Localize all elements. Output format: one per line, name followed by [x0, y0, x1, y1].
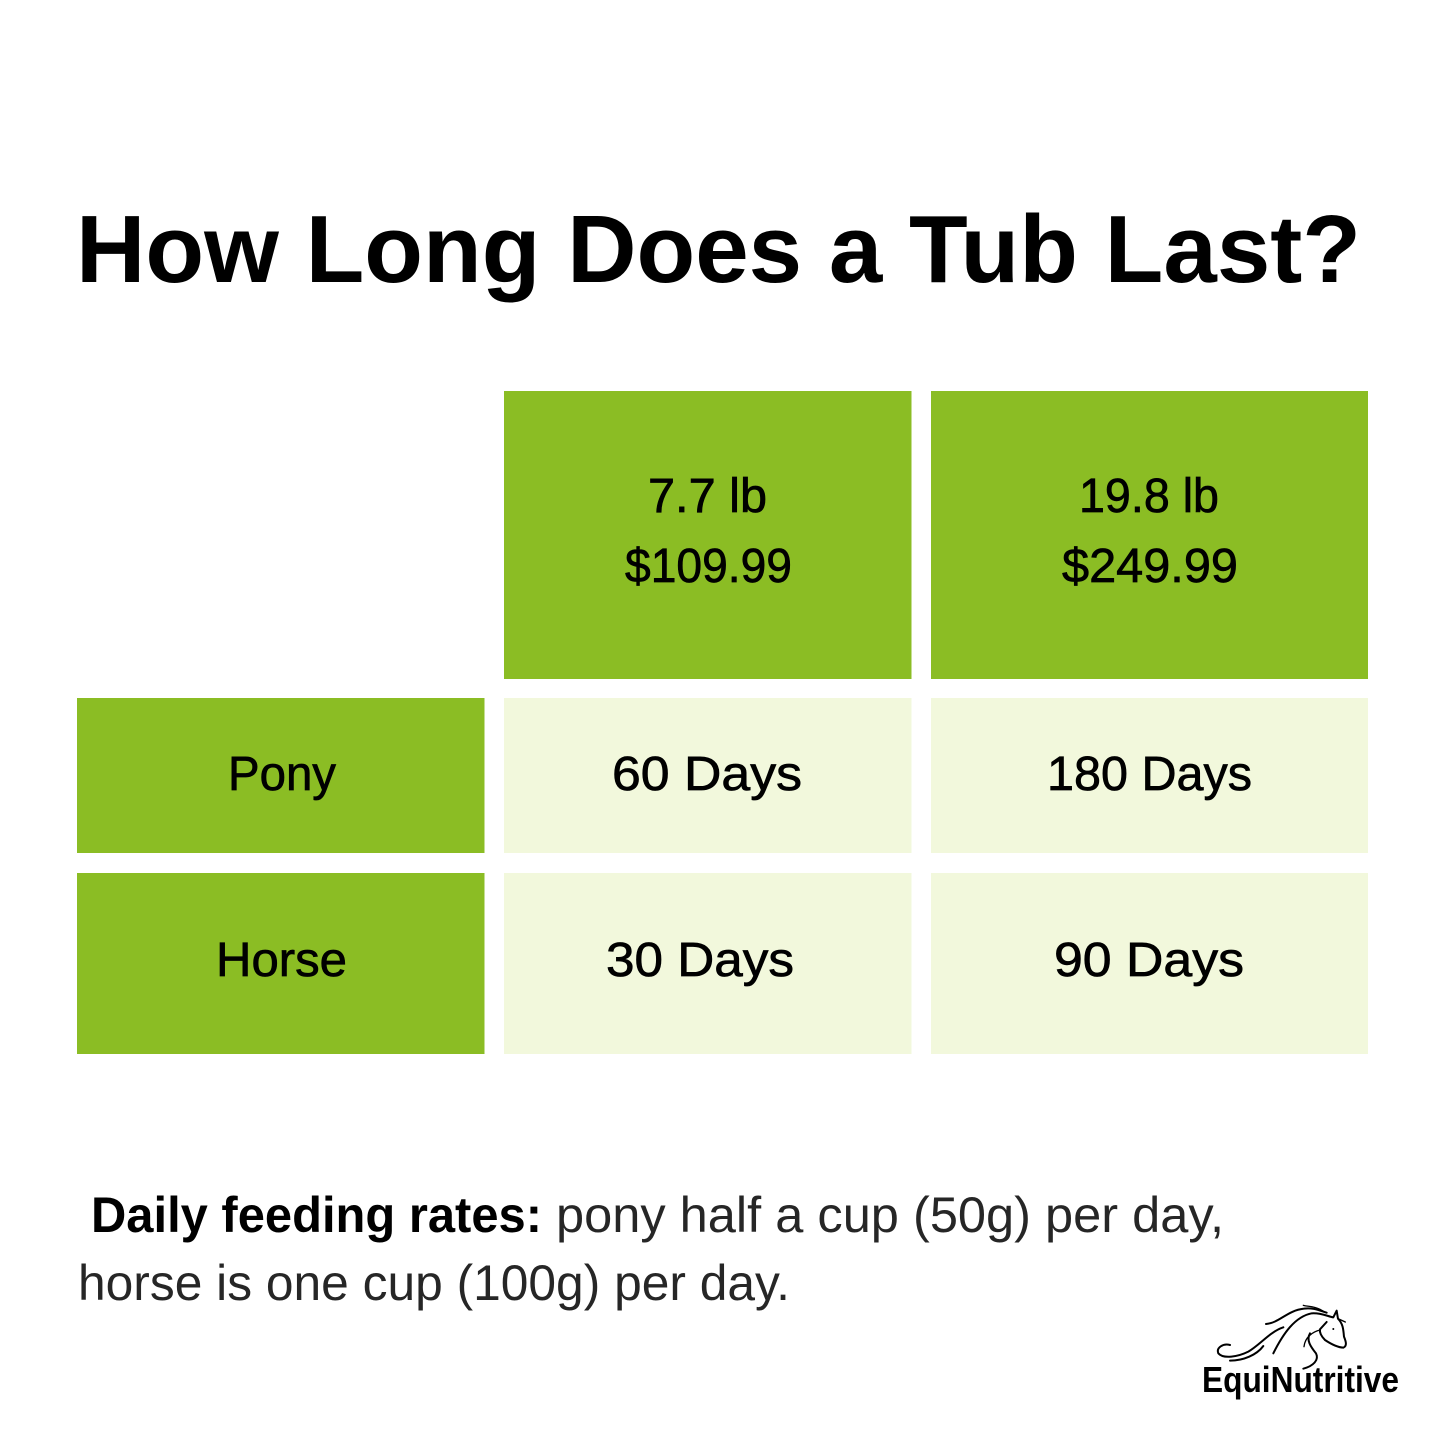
header cell: 7.7 lb tub: $109.99	[625, 540, 792, 593]
row label: Pony	[77, 698, 484, 853]
header cell: 19.8 lb tub: 19.8 lb	[1079, 470, 1219, 523]
cell: Pony 7.7 lb: 60 Days	[612, 748, 802, 801]
cell: Horse 7.7 lb	[504, 873, 912, 1054]
logo: EquiNutritive	[1202, 1305, 1399, 1400]
icon: horse	[1218, 1305, 1346, 1369]
feeding rates note: pony half a cup (50g) per day,	[556, 1187, 1224, 1243]
row label: Pony: Pony	[228, 748, 336, 801]
header cell: 7.7 lb tub	[504, 391, 912, 679]
row label: Horse: Horse	[216, 934, 347, 987]
feeding rates note: horse is one cup (100g) per day.	[78, 1255, 790, 1311]
table	[77, 391, 1368, 1054]
row label: Horse	[77, 873, 484, 1054]
logo wordmark: EquiNutritive	[1202, 1359, 1399, 1400]
cell: Pony 19.8 lb	[931, 698, 1368, 853]
feeding rates note: Daily feeding rates:	[91, 1187, 542, 1243]
header cell: 19.8 lb tub	[931, 391, 1368, 679]
cell: Horse 7.7 lb: 30 Days	[606, 934, 794, 987]
header cell: 7.7 lb tub: 7.7 lb	[648, 470, 767, 523]
title: How Long Does a Tub Last?	[76, 196, 1361, 303]
cell: Horse 19.8 lb	[931, 873, 1368, 1054]
cell: Horse 19.8 lb: 90 Days	[1054, 934, 1244, 987]
cell: Pony 19.8 lb: 180 Days	[1047, 748, 1252, 801]
feeding rates note	[78, 1187, 1224, 1311]
cell: Pony 7.7 lb	[504, 698, 912, 853]
header cell: 19.8 lb tub: $249.99	[1062, 540, 1238, 593]
